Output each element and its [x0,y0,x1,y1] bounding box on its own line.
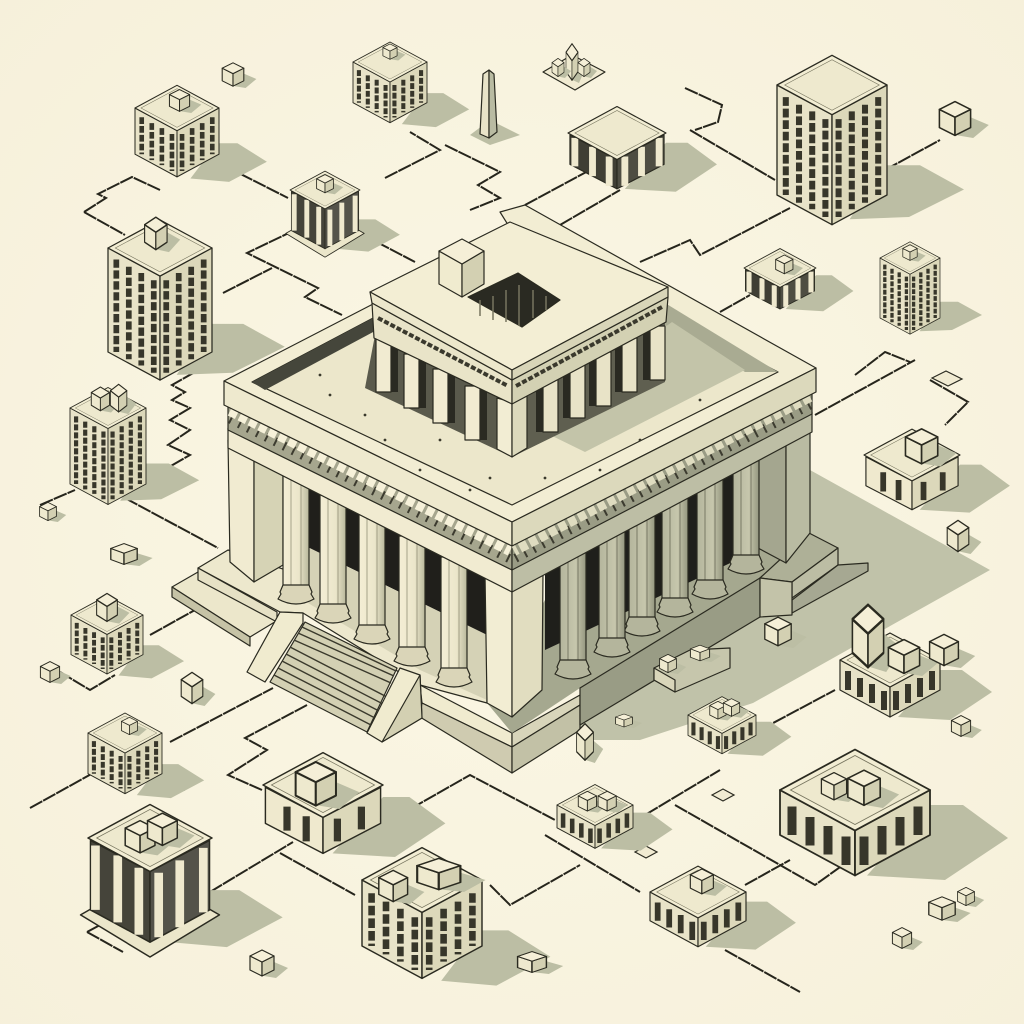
staircase [247,612,422,742]
building: centre foreground [688,697,791,756]
main temple [172,205,868,773]
building: bottom right small [650,866,796,950]
main roof [224,205,816,522]
building: top right tower [777,55,964,225]
roof box [439,239,484,297]
right portico floor [487,450,809,733]
building: right tower [880,242,982,334]
building: right small [744,249,853,311]
upper roof [370,222,668,370]
left architrave [228,428,512,592]
upper corner pier [497,398,512,457]
building: bottom centre small [557,784,673,851]
front platform tiers [420,685,580,773]
right interior [545,450,758,650]
building: bottom centre [362,848,550,986]
building: left bottom [88,713,204,798]
right dentil frieze [512,390,812,570]
right end pier [758,442,786,563]
building: top centre tall [353,42,469,127]
roof shadow [540,322,745,452]
roof speckles [319,374,701,491]
upper colonnade [376,326,665,440]
upper right frieze [512,297,668,404]
obelisk [470,70,520,145]
building: bottom right large [780,750,1008,880]
building: right cluster [840,605,992,720]
building: bottom left columns [81,805,283,957]
right plinth tiers [760,533,868,617]
left platform tiers [172,550,487,703]
building: left lower [71,593,184,678]
upper storey [365,222,668,457]
monument plaza [543,44,605,90]
small ground squares [635,371,962,858]
left dentil frieze [228,405,512,570]
building: top left [135,85,267,182]
right colonnade [555,435,764,679]
building: left tower [70,384,199,505]
building: upper left small [286,171,400,257]
building: bottom left flat [263,753,445,857]
parapet inner shadow [252,317,375,390]
building: left block [108,217,285,380]
right plinth wall [580,578,760,725]
left colonnade [278,465,472,687]
foreground rubble block [577,617,807,763]
upper left frieze [372,303,512,404]
building: pavilion [568,107,717,192]
left end pier [228,440,254,582]
roof light well [468,273,560,327]
building: right mid [864,429,1010,513]
left interior [283,468,487,635]
front corner pier [485,573,512,717]
main temple cast shadow [580,470,990,740]
right architrave [512,412,812,592]
